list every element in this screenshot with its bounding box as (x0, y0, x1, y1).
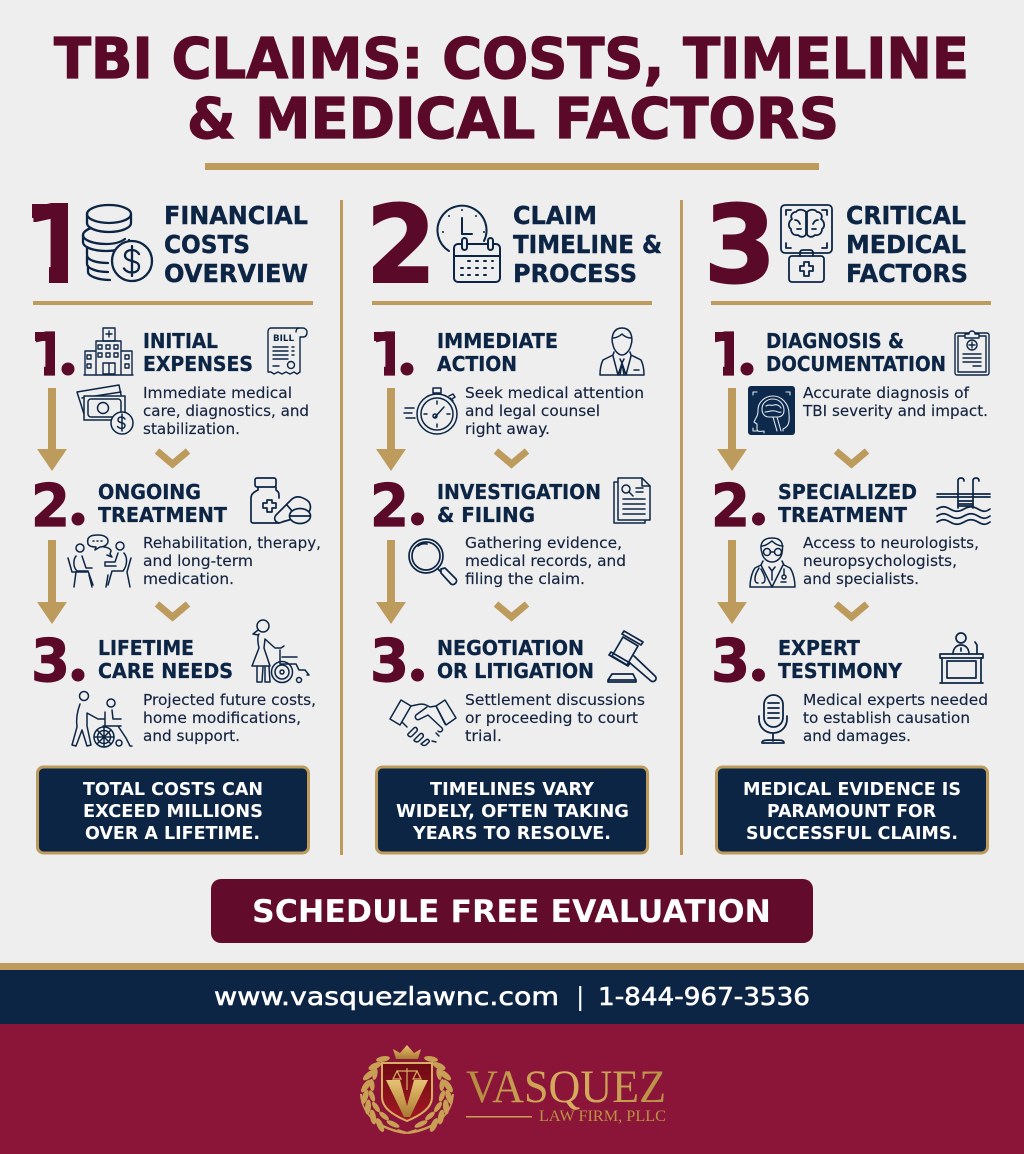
icon: documents (614, 478, 650, 523)
body text: investigation: medical records, and (465, 552, 626, 570)
body text: diagnosis (802, 384, 988, 420)
callout: timelines vary: TIMELINES VARY (430, 779, 595, 800)
body text: investigation: filing the claim. (465, 570, 585, 588)
body text: lifetime care: Projected future costs, (143, 691, 316, 709)
body text: expert testimony: to establish causation (803, 709, 970, 727)
heading: critical medical factors (846, 201, 968, 288)
contact bar: 1-844-967-3536 (598, 982, 810, 1011)
panel number 1: 1 (23, 184, 93, 308)
logo crest (359, 1045, 455, 1134)
contact bar: www.vasquezlawnc.com (214, 982, 559, 1011)
step 1 number: 1 (710, 320, 748, 389)
body text: expert testimony: and damages. (803, 727, 911, 745)
chevron (157, 604, 188, 617)
body text: expert testimony (803, 691, 988, 745)
callout: medical evidence: MEDICAL EVIDENCE IS (743, 779, 961, 800)
body text: ongoing treatment: Rehabilitation, therapy, (143, 534, 321, 552)
callout: medical evidence: PARAMOUNT FOR (767, 801, 936, 822)
body text: specialized: and specialists. (803, 570, 919, 588)
heading: critical medical factors: MEDICAL (846, 230, 966, 259)
arrow down (37, 388, 67, 471)
chevron (496, 451, 527, 464)
step 1 number: 1 (30, 320, 68, 389)
icon: pill bottle and capsule (251, 478, 310, 524)
heading: diagnosis and documentation (766, 329, 946, 376)
body text: initial expenses: care, diagnostics, and (143, 402, 309, 420)
body text: lifetime care: home modifications, (143, 709, 301, 727)
heading: ongoing treatment: TREATMENT (98, 503, 227, 527)
heading: ongoing treatment (98, 480, 227, 527)
icon: person pushing wheelchair (72, 692, 132, 747)
icon: clock and calendar (437, 206, 500, 282)
body text: lifetime care (143, 691, 316, 745)
wordmark: VASQUEZ (466, 1061, 666, 1113)
heading: immediate action (437, 329, 558, 376)
heading: lifetime care needs (98, 636, 233, 683)
step 2 number: 2 (31, 471, 70, 540)
callout: timelines vary: WIDELY, OFTEN TAKING (396, 801, 629, 822)
heading: claim timeline and process (513, 201, 662, 288)
heading: financial costs overview: COSTS (164, 230, 250, 259)
call to action button (211, 879, 813, 943)
body text: investigation (465, 534, 626, 588)
body text: specialized: Access to neurologists, (803, 534, 979, 552)
icon: gavel (608, 631, 656, 682)
body text: specialized (803, 534, 979, 588)
arrow down (376, 540, 406, 624)
body text: expert testimony: Medical experts needed (803, 691, 988, 709)
step 1 number (374, 331, 414, 376)
body text: negotiation: or proceeding to court (465, 709, 638, 727)
chevron (836, 604, 867, 617)
callout: medical evidence (716, 767, 988, 853)
panel number 1 (32, 203, 68, 283)
chevron (836, 451, 867, 464)
callout: total costs: OVER A LIFETIME. (85, 823, 260, 844)
step 3 number: 3 (31, 626, 70, 695)
heading: investigation and filing: & FILING (437, 503, 535, 527)
body text: immediate action: right away. (465, 420, 550, 438)
heading: expert testimony (778, 636, 902, 683)
panel: claim timeline (366, 184, 662, 853)
panel: financial costs (23, 184, 321, 853)
arrow down (376, 388, 406, 471)
icon: brain head scan (748, 386, 795, 435)
icon: stopwatch (404, 388, 457, 434)
icon: doctor (750, 538, 795, 587)
heading: initial expenses: EXPENSES (143, 352, 253, 376)
heading: expert testimony: TESTIMONY (778, 659, 902, 683)
heading: immediate action: ACTION (437, 352, 517, 376)
heading: investigation and filing (437, 480, 601, 527)
step 1 number (35, 331, 74, 376)
body text: investigation: Gathering evidence, (465, 534, 622, 552)
heading: specialized treatment: TREATMENT (778, 503, 907, 527)
contact bar (0, 970, 1024, 1024)
contact bar: | (576, 982, 584, 1011)
heading: specialized treatment (778, 480, 917, 527)
arrow down (37, 540, 67, 624)
icon: microphone (759, 695, 787, 743)
heading: financial costs overview: FINANCIAL (164, 201, 308, 230)
arrow down (717, 540, 747, 624)
body text: specialized: neuropsychologists, (803, 552, 957, 570)
icon: caregiver with wheelchair (252, 620, 309, 682)
callout: timelines vary: YEARS TO RESOLVE. (412, 823, 611, 844)
step 2 number: . (410, 487, 425, 533)
step 3 number: . (410, 643, 425, 689)
heading: diagnosis and documentation: DIAGNOSIS & (766, 329, 904, 353)
heading: diagnosis and documentation: DOCUMENTATION (766, 352, 946, 376)
body text: ongoing treatment: medication. (143, 570, 234, 588)
icon: hospital (84, 328, 133, 375)
heading: ongoing treatment: ONGOING (98, 480, 201, 504)
body text: initial expenses: stabilization. (143, 420, 240, 438)
heading: claim timeline and process: PROCESS (513, 259, 637, 288)
call to action button: SCHEDULE FREE EVALUATION (252, 894, 771, 930)
step 1 number: 1 (370, 320, 408, 389)
heading: immediate action: IMMEDIATE (437, 329, 558, 353)
body text: negotiation (465, 691, 645, 745)
logo: Vasquez Law Firm: LAW FIRM, PLLC (539, 1108, 666, 1125)
icon: therapy session (68, 535, 131, 587)
heading: claim timeline and process: CLAIM (513, 201, 597, 230)
step 1 number: . (60, 337, 76, 383)
step 3 number: . (751, 643, 766, 689)
heading: claim timeline and process: TIMELINE & (513, 230, 662, 259)
step 3 number: . (70, 643, 86, 689)
footer band (0, 1024, 1024, 1154)
heading: critical medical factors: CRITICAL (846, 201, 966, 230)
callout: total costs: EXCEED MILLIONS (83, 801, 263, 822)
step 2 number: 2 (370, 471, 409, 540)
heading: negotiation or litigation (437, 636, 594, 683)
heading: initial expenses (143, 329, 253, 376)
body text: immediate action: and legal counsel (465, 402, 600, 420)
icon: coin stack with dollar (83, 205, 152, 281)
step 1 number: . (739, 337, 755, 383)
icon: bill (268, 328, 307, 374)
panel number 3: 3 (704, 184, 776, 308)
body text: lifetime care: and support. (143, 727, 240, 745)
step 2 number: . (751, 487, 766, 533)
body text: ongoing treatment: and long-term (143, 552, 253, 570)
icon: brain scan and medical kit (781, 205, 832, 282)
heading: lifetime care needs: LIFETIME (98, 636, 194, 660)
heading: financial costs overview: OVERVIEW (164, 259, 308, 288)
heading: negotiation or litigation: OR LITIGATION (437, 659, 594, 683)
step 1 number: . (399, 337, 415, 383)
step 3 number: 3 (711, 626, 750, 695)
callout: timelines vary (376, 767, 648, 853)
title: TBI CLAIMS: COSTS, TIMELINE (54, 27, 969, 92)
body text: immediate action: Seek medical attention (465, 384, 644, 402)
panel: critical medical factors (704, 184, 991, 853)
callout: total costs: TOTAL COSTS CAN (83, 779, 263, 800)
body text: diagnosis: TBI severity and impact. (802, 402, 988, 420)
chevron (496, 604, 527, 617)
step 3 number: 3 (370, 626, 409, 695)
body text: negotiation: Settlement discussions (465, 691, 645, 709)
title (54, 27, 969, 152)
icon: clipboard (955, 331, 989, 375)
icon: cash (77, 385, 133, 434)
body text: negotiation: trial. (465, 727, 502, 745)
title: & MEDICAL FACTORS (187, 87, 839, 152)
logo: Vasquez Law Firm (359, 1045, 666, 1134)
body text: diagnosis: Accurate diagnosis of (803, 384, 970, 402)
heading: investigation and filing: INVESTIGATION (437, 480, 601, 504)
callout: total costs (38, 767, 308, 853)
step 1 number (715, 331, 754, 376)
arrow down (717, 388, 747, 471)
step 2 number: . (70, 487, 86, 533)
chevron (157, 451, 188, 464)
heading: negotiation or litigation: NEGOTIATION (437, 636, 584, 660)
body text: initial expenses: Immediate medical (143, 384, 292, 402)
body text: immediate action (465, 384, 644, 438)
icon: podium (940, 633, 983, 683)
body text: ongoing treatment (143, 534, 321, 588)
heading: financial costs overview (164, 201, 308, 288)
panel number 2: 2 (366, 184, 436, 308)
icon: bill: BILL (273, 334, 294, 344)
icon: handshake (390, 700, 456, 745)
heading: specialized treatment: SPECIALIZED (778, 480, 917, 504)
heading: lifetime care needs: CARE NEEDS (98, 659, 233, 683)
icon: businessperson (600, 328, 644, 375)
body text: initial expenses (143, 384, 309, 438)
heading: initial expenses: INITIAL (143, 329, 218, 353)
heading: critical medical factors: FACTORS (846, 259, 968, 288)
icon: magnifying glass (409, 539, 457, 585)
icon: pool ladder (937, 478, 990, 524)
heading: expert testimony: EXPERT (778, 636, 860, 660)
callout: medical evidence: SUCCESSFUL CLAIMS. (746, 823, 958, 844)
step 2 number: 2 (711, 471, 750, 540)
